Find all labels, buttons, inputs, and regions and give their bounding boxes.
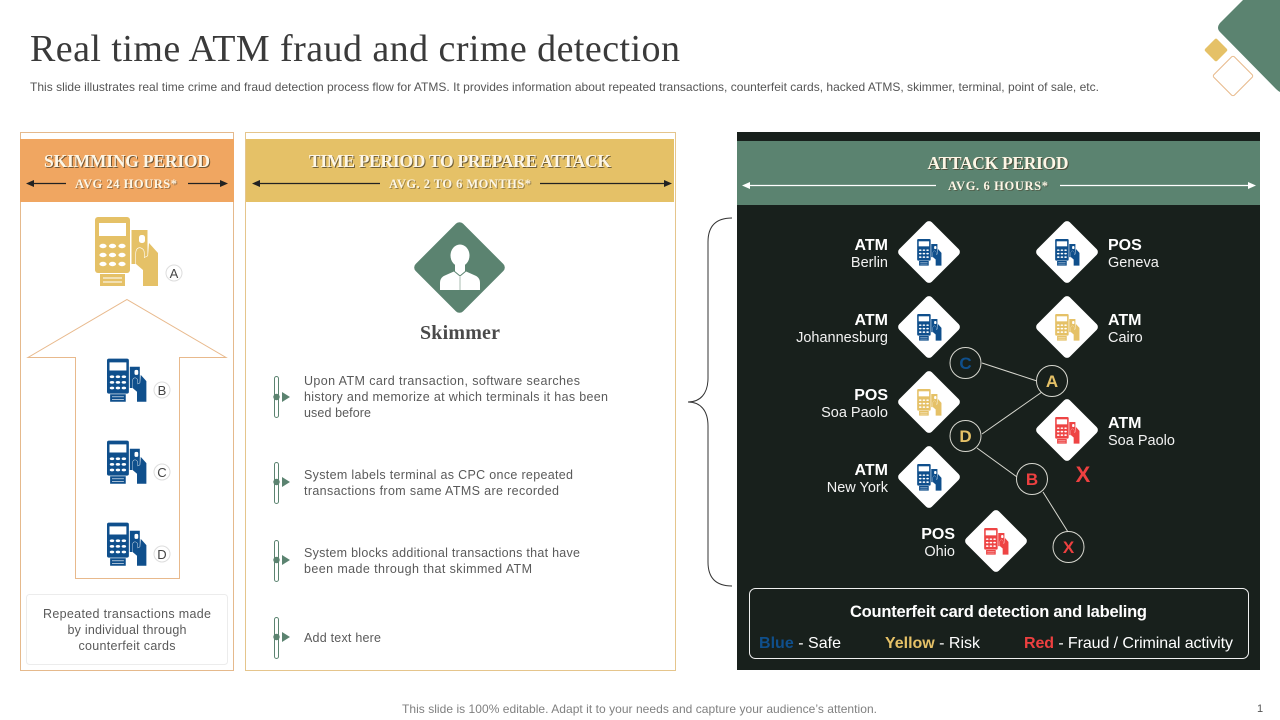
attack duration arrows: [742, 182, 1256, 189]
node: POS Geneva: [1034, 219, 1160, 285]
badge B: B: [158, 383, 166, 398]
bullet marker 4: [273, 618, 290, 658]
circle C: [950, 348, 981, 378]
node: POS Soa Paolo: POS: [854, 387, 888, 404]
node: POS Ohio: Ohio: [924, 544, 955, 560]
step 1 text: [304, 374, 608, 420]
node: ATM Berlin: Berlin: [851, 255, 888, 271]
page number: 1: [1257, 703, 1263, 715]
icon: terminal C: [107, 441, 146, 484]
prepare duration: AVG. 2 TO 6 MONTHS*: [389, 177, 531, 191]
skimming heading: SKIMMING PERIOD: [44, 151, 210, 171]
step 2 text: transactions from same ATMS are recorded: [304, 484, 559, 498]
note box: by individual through: [68, 623, 187, 637]
legend box: [750, 588, 1248, 658]
brace connector: [688, 218, 732, 586]
note box: [26, 594, 228, 664]
footer note: This slide is 100% editable. Adapt it to your needs and capture your audience’s attention.: [402, 702, 877, 716]
node: ATM Berlin: ATM: [855, 237, 888, 254]
skimming header band: [20, 139, 234, 202]
skimmer label: Skimmer: [420, 322, 500, 344]
icon: terminal D: [107, 523, 146, 566]
attack header band: [737, 141, 1260, 205]
title: Real time ATM fraud and crime detection: [30, 28, 680, 70]
step 1 text: used before: [304, 406, 371, 420]
prepare duration arrows: [252, 180, 672, 187]
circle A: A: [1046, 372, 1058, 391]
node: POS Soa Paolo: [821, 369, 962, 435]
node: POS Geneva: Geneva: [1108, 255, 1160, 271]
step 3 text: been made through that skimmed ATM: [304, 562, 532, 576]
node: POS Ohio: POS: [921, 526, 955, 543]
badge A: [166, 265, 182, 281]
step 1 text: history and memorize at which terminals it has been: [304, 390, 608, 404]
badge C: [154, 464, 170, 480]
attack heading: ATTACK PERIOD: [928, 153, 1068, 173]
node: ATM Berlin: [851, 219, 962, 285]
node: POS Soa Paolo: Soa Paolo: [821, 405, 888, 421]
skimming duration: AVG 24 HOURS*: [75, 177, 177, 191]
panel: time period to prepare attack: [246, 132, 676, 670]
badge A: A: [170, 266, 179, 281]
step 2 text: [304, 468, 573, 498]
circle X: X: [1063, 538, 1075, 557]
circle X: [1053, 532, 1084, 562]
step 3 text: System blocks additional transactions that have: [304, 546, 580, 560]
node: ATM Cairo: ATM: [1108, 312, 1141, 329]
attack duration: AVG. 6 HOURS*: [948, 179, 1048, 193]
node: ATM Soa Paolo: Soa Paolo: [1108, 433, 1175, 449]
circle D: D: [959, 427, 972, 446]
node: POS Geneva: POS: [1108, 237, 1142, 254]
node: ATM Johannesburg: [796, 294, 962, 360]
icon: skimmer person: [412, 220, 507, 315]
fraud X mark: X: [1076, 462, 1091, 487]
node: ATM Johannesburg: ATM: [855, 312, 888, 329]
step 4 text: Add text here: [304, 631, 381, 645]
connector lines: [977, 363, 1068, 532]
bullet marker 1: [273, 376, 290, 418]
legend title: Counterfeit card detection and labeling: [850, 603, 1147, 621]
node: ATM Soa Paolo: ATM: [1108, 415, 1141, 432]
step 1 text: Upon ATM card transaction, software searches: [304, 374, 580, 388]
step 3 text: [304, 546, 580, 576]
badge D: [154, 546, 170, 562]
node: ATM Cairo: [1034, 294, 1143, 360]
badge C: C: [157, 465, 167, 480]
legend: blue safe: Blue - Safe: [759, 635, 841, 652]
node: ATM New York: New York: [827, 480, 889, 496]
icon: terminal B: [107, 359, 146, 402]
corner decoration: [1204, 0, 1280, 97]
note box: Repeated transactions made: [43, 607, 211, 621]
panel: skimming period: [20, 132, 234, 670]
icon: terminal A: [95, 217, 158, 286]
step 2 text: System labels terminal as CPC once repeated: [304, 468, 573, 482]
legend: red fraud: Red - Fraud / Criminal activity: [1024, 635, 1233, 652]
badge D: D: [157, 547, 167, 562]
skimming duration arrows: [26, 180, 228, 187]
circle D: [950, 420, 981, 452]
circle C: C: [959, 354, 972, 373]
bullet marker 2: [273, 462, 290, 504]
note box: counterfeit cards: [78, 639, 176, 653]
node: ATM Cairo: Cairo: [1108, 330, 1143, 346]
node: ATM Johannesburg: Johannesburg: [796, 330, 888, 346]
circle B: B: [1026, 470, 1038, 489]
node: ATM New York: ATM: [855, 462, 888, 479]
circle B: [1016, 464, 1048, 494]
upward arrow outline: [28, 300, 226, 578]
circle A: [1036, 366, 1068, 396]
prepare header band: [246, 139, 674, 202]
node: ATM Soa Paolo: [1034, 397, 1175, 463]
bullet marker 3: [273, 540, 290, 582]
node: POS Ohio: [921, 508, 1029, 574]
panel: attack period: [737, 132, 1260, 670]
badge B: [154, 382, 170, 398]
node: ATM New York: [827, 444, 962, 510]
subtitle description: This slide illustrates real time crime and fraud detection process flow for ATMS. It provides information about repeated transactions, counterfeit cards, hacked ATMS, skimmer, terminal, point of sale, etc.: [30, 80, 1099, 94]
legend: yellow risk: Yellow - Risk: [885, 635, 981, 652]
prepare heading: TIME PERIOD TO PREPARE ATTACK: [309, 151, 611, 171]
